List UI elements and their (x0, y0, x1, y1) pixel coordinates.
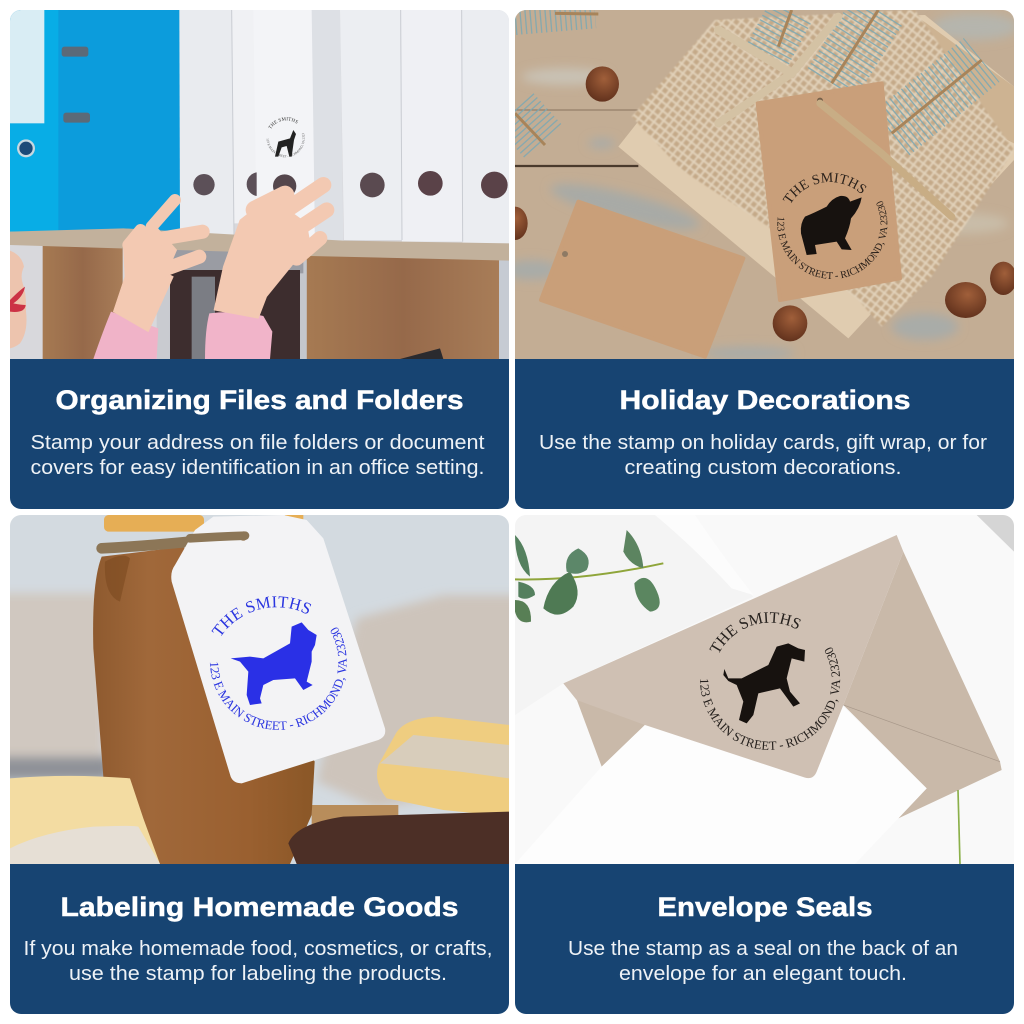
shelf (10, 228, 509, 261)
icon: dog silhouette (801, 196, 862, 255)
body text: Use the stamp on holiday cards, gift wrap, or for (539, 432, 987, 454)
honey jar (93, 515, 315, 864)
caption panel (515, 359, 1014, 509)
heading: Organizing Files and Folders (56, 385, 463, 415)
panel: envelope seals (515, 515, 1014, 1014)
gift box (618, 10, 1014, 338)
heading: Holiday Decorations (620, 385, 910, 415)
small address stamp: 123 E MAIN STREET - RICHMOND, VA 23230 (266, 133, 305, 158)
panel: labeling homemade goods (10, 515, 509, 1014)
body text: Use the stamp as a seal on the back of an (568, 938, 958, 960)
body text (24, 938, 493, 985)
right cookie (377, 717, 509, 817)
photo: folders on a shelf (10, 10, 509, 359)
pine branches (515, 10, 982, 145)
body text (539, 432, 987, 479)
panel: holiday decorations (515, 10, 1014, 509)
stamp text: THE SMITHS (212, 596, 312, 636)
caption panel (515, 864, 1014, 1014)
body text: envelope for an elegant touch. (619, 963, 907, 985)
body text: If you make homemade food, cosmetics, or crafts, (24, 938, 493, 960)
caption panel (10, 864, 509, 1014)
hanging tag: 123 E MAIN STREET - RICHMOND, VA 23230 (210, 628, 347, 730)
white binders (179, 10, 509, 243)
icon: dog silhouette (723, 643, 805, 723)
twine bow (718, 17, 838, 123)
panel: organizing files and folders (10, 10, 509, 509)
envelope flap with stamp (564, 535, 904, 778)
stamped kraft tag (756, 81, 956, 302)
child's face (10, 251, 27, 348)
blank kraft tag (541, 202, 743, 357)
hanging tag (171, 515, 386, 784)
white card (515, 707, 927, 864)
left cookie (10, 776, 160, 864)
hazelnuts (502, 66, 1017, 341)
small address stamp: THE SMITHS (268, 117, 298, 129)
stamped kraft tag: 123 E MAIN STREET - RICHMOND, VA 23230 (777, 201, 888, 279)
photo: envelope (515, 515, 1014, 864)
stamp text: THE SMITHS (782, 172, 866, 204)
blue binder (10, 10, 180, 232)
hands (113, 185, 327, 332)
chocolate cookie (288, 812, 509, 864)
body text: use the stamp for labeling the products. (69, 963, 447, 985)
photo: gift with kraft tags (515, 10, 1014, 359)
sleeves (93, 312, 272, 359)
envelope back (575, 552, 1002, 818)
body text (30, 432, 485, 479)
small address stamp (266, 117, 305, 158)
eucalyptus sprig (515, 530, 663, 622)
heading: Envelope Seals (658, 892, 872, 922)
icon: dog silhouette (231, 622, 317, 705)
photo: jar and tag (10, 515, 509, 864)
body text (568, 938, 958, 985)
caption panel (10, 359, 509, 509)
envelope flap with stamp: 123 E MAIN STREET - RICHMOND, VA 23230 (700, 648, 840, 750)
green stem (958, 790, 960, 864)
heading: Labeling Homemade Goods (60, 892, 459, 922)
body text: Stamp your address on file folders or document (30, 432, 485, 454)
body text: covers for easy identification in an office setting. (30, 457, 484, 479)
blurred blankets (0, 593, 523, 808)
body text: creating custom decorations. (624, 457, 902, 479)
stamp text: THE SMITHS (709, 612, 801, 653)
